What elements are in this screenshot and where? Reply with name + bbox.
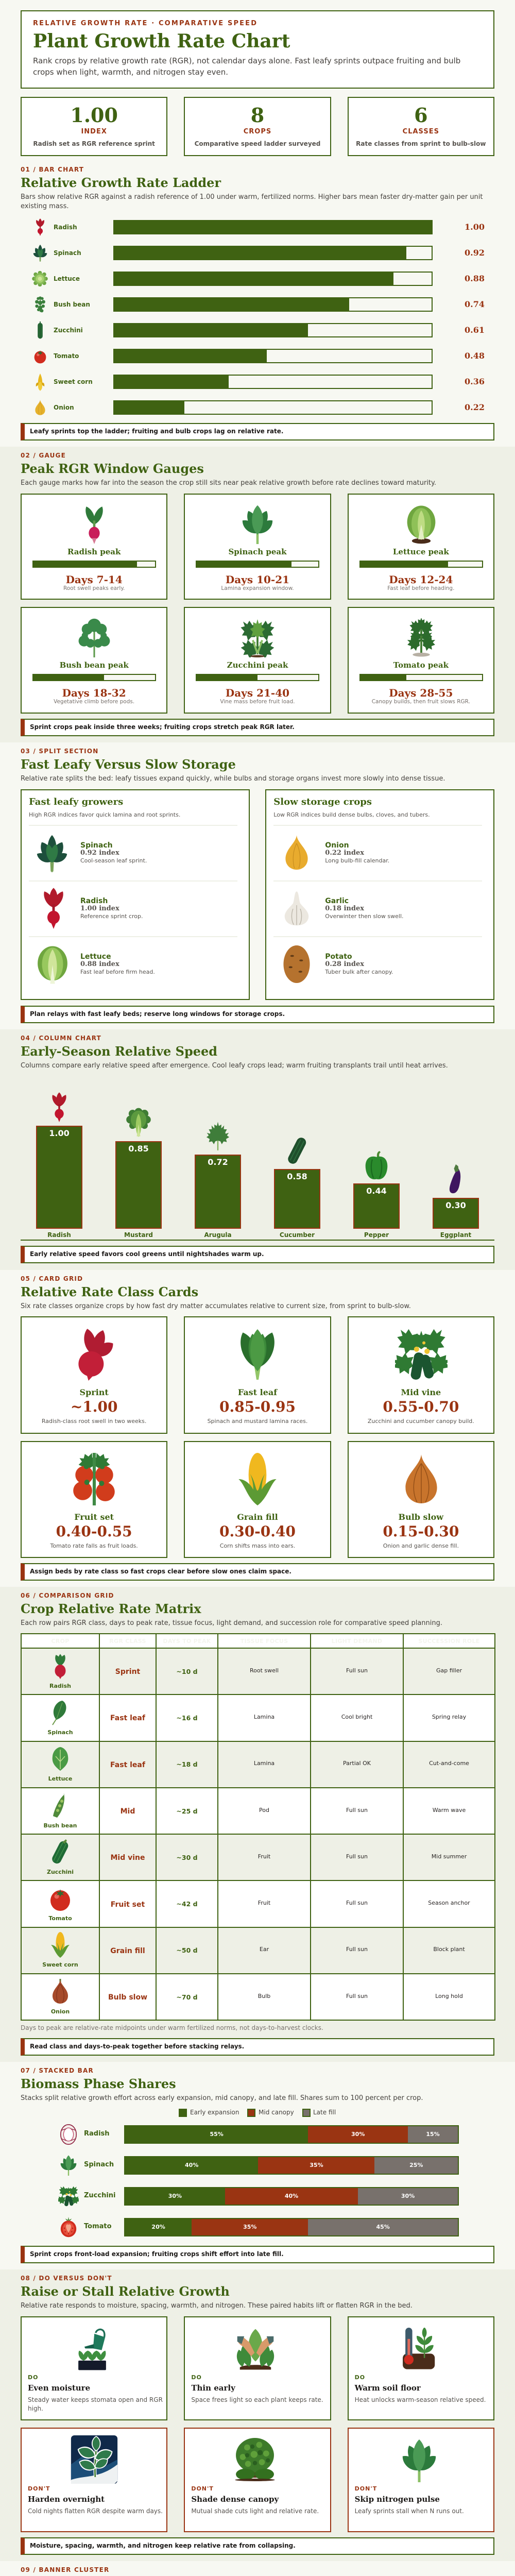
don't card: shade dense canopy: DON'T [191, 2485, 214, 2492]
class card: fruit set: Fruit set [74, 1512, 114, 1522]
comparison table: Spinach [47, 1729, 73, 1736]
stat card: classes [348, 97, 494, 156]
class card: mid vine [348, 1316, 494, 1434]
comparison table: Cut-and-come [429, 1760, 469, 1767]
crop item: garlic: 0.18 index [325, 905, 364, 912]
column: arugula: 0.72 [208, 1157, 228, 1167]
comparison table: DAYS TO PEAK [163, 1637, 211, 1645]
do card: thin early [184, 2316, 331, 2420]
crop item: potato [283, 945, 393, 983]
heading: Raise or Stall Relative Growth [21, 2284, 230, 2299]
class card: fruit set: Tomato rate falls as fruit loads. [50, 1543, 138, 1549]
comparison table: Ear [260, 1946, 269, 1953]
legend: Early expansion [190, 2109, 239, 2116]
bar row: spinach: 0.92 [465, 248, 485, 258]
column: cucumber: 0.58 [287, 1172, 307, 1181]
column: cucumber: Cucumber [280, 1231, 315, 1239]
class card: fast leaf [184, 1316, 331, 1434]
comparison table: Tomato [48, 1915, 72, 1922]
column: eggplant [433, 1164, 479, 1239]
legend: Late fill [313, 2109, 336, 2116]
crop item: radish [44, 888, 143, 929]
comparison table: TISSUE FOCUS [241, 1637, 288, 1645]
section 04: column chart [0, 1029, 515, 1270]
crop item: lettuce: Fast leaf before firm head. [80, 969, 155, 975]
gauge card: bush bean: Vegetative climb before pods. [54, 699, 134, 705]
stacked row: zucchini: Zucchini [84, 2192, 116, 2199]
column: radish: Radish [47, 1231, 71, 1239]
stacked row: zucchini: 40% [285, 2193, 298, 2199]
class card: fast leaf: Fast leaf [238, 1387, 277, 1397]
bar row: zucchini: 0.61 [465, 325, 485, 335]
bar row: onion: Onion [54, 404, 74, 411]
gauge card: bush bean [21, 607, 167, 714]
comparison table: Gap filler [436, 1667, 462, 1674]
class card: bulb slow: 0.15-0.30 [383, 1523, 459, 1540]
column: cucumber [274, 1138, 320, 1239]
stacked row: radish: 55% [210, 2131, 224, 2138]
comparison table: Fast leaf [110, 1714, 145, 1722]
section label: 04 / COLUMN CHART [21, 1035, 101, 1042]
gauge card: bush bean: Bush bean peak [60, 660, 129, 670]
comparison table: Sprint [115, 1668, 140, 1676]
crop item: potato: 0.28 index [325, 960, 364, 968]
comparison table: Bush bean [43, 1822, 77, 1829]
bar row: bush bean: Bush bean [54, 301, 90, 308]
class card: bulb slow: Onion and garlic dense fill. [383, 1543, 459, 1549]
comparison table: Sweet corn [42, 1961, 78, 1968]
don't card: harden overnight: Harden overnight [28, 2495, 105, 2504]
comparison table: LIGHT DEMAND [332, 1637, 382, 1645]
section 06: comparison grid [0, 1587, 515, 2062]
do card: thin early: Thin early [191, 2383, 235, 2393]
bar row: onion: 0.22 [465, 402, 485, 412]
gauge card: zucchini: Days 21-40 [226, 687, 289, 699]
callout [21, 1246, 494, 1263]
section 02: gauges [0, 447, 515, 742]
stacked row: spinach: 25% [409, 2162, 423, 2168]
comparison table: ~42 d [176, 1900, 198, 1908]
section 05: card grid [21, 1275, 494, 1581]
gauge card: tomato: Days 28-55 [389, 687, 453, 699]
comparison table: Fruit set [111, 1901, 145, 1909]
don't card: shade dense canopy [184, 2428, 331, 2532]
bar row: lettuce: 0.88 [465, 274, 485, 283]
crop item: spinach: 0.92 index [80, 849, 119, 857]
crop item: radish: Radish [80, 897, 108, 905]
don't card: skip nitrogen pulse: Skip nitrogen pulse [355, 2495, 440, 2504]
comparison table: Lamina [254, 1760, 274, 1767]
stacked row: radish: 30% [351, 2131, 365, 2138]
class card: mid vine: Mid vine [401, 1387, 441, 1397]
comparison table: Spring relay [432, 1714, 466, 1720]
do card: even moisture: Steady water keeps stomata open and RGR high. [28, 2396, 163, 2412]
do card: even moisture [21, 2316, 167, 2420]
don't card: skip nitrogen pulse [348, 2428, 494, 2532]
section: hero and stats [21, 10, 494, 156]
comparison table: Mid [121, 1807, 135, 1816]
stat card: crops: Comparative speed ladder surveyed [195, 140, 320, 147]
section label: 01 / BAR CHART [21, 166, 84, 173]
column: mustard [115, 1108, 162, 1239]
stat card: index: 1.00 [70, 104, 118, 127]
class card: bulb slow: Bulb slow [399, 1512, 443, 1522]
callout [21, 2038, 494, 2056]
class card: sprint [21, 1316, 167, 1434]
stacked row: spinach: 35% [310, 2162, 323, 2168]
comparison table: Full sun [346, 1900, 368, 1906]
heading: Early-Season Relative Speed [21, 1044, 217, 1059]
comparison table [21, 1633, 495, 2021]
section 01: bar chart [21, 166, 494, 440]
heading: Peak RGR Window Gauges [21, 461, 204, 476]
stacked row: spinach [61, 2156, 459, 2176]
comparison table: Lamina [254, 1714, 274, 1720]
stacked row: zucchini: 30% [401, 2193, 415, 2199]
gauge card: lettuce: Lettuce peak [393, 547, 449, 556]
stacked row: radish: 15% [426, 2131, 440, 2138]
panel: slow storage crops: Low RGR indices build dense bulbs, cloves, and tubers. [273, 811, 430, 818]
comparison table: Block plant [433, 1946, 465, 1953]
stat card: classes: CLASSES [403, 128, 439, 135]
comparison table: Grain fill [110, 1947, 145, 1955]
column: pepper [353, 1151, 400, 1239]
class card: sprint: ~1.00 [71, 1398, 117, 1415]
crop item: lettuce [38, 946, 155, 984]
stacked row: tomato [61, 2217, 459, 2237]
class card: sprint: Radish-class root swell in two weeks. [42, 1418, 146, 1425]
comparison table: RGR CLASS [109, 1637, 146, 1645]
callout [21, 423, 494, 440]
comparison table: Bulb slow [108, 1993, 147, 2002]
legend [179, 2109, 336, 2117]
gauge card: tomato: Canopy builds, then fruit slows RGR. [372, 699, 470, 705]
gauge card: spinach: Days 10-21 [226, 573, 289, 586]
table footnote: Days to peak are relative-rate midpoints under warm fertilized norms, not days-to-harvest clocks. [21, 2024, 323, 2031]
do card: warm soil floor: Heat unlocks warm-season relative speed. [355, 2396, 486, 2403]
comparison table: CROP [51, 1637, 70, 1645]
panel: slow storage crops: Slow storage crops [273, 796, 372, 807]
section 09: banner cluster [21, 2566, 257, 2576]
class card: fruit set: 0.40-0.55 [56, 1523, 132, 1540]
gauge card: radish: Root swell peaks early. [63, 585, 125, 591]
class card: bulb slow [348, 1441, 494, 1558]
section label: 02 / GAUGE [21, 452, 66, 459]
column: arugula [195, 1122, 241, 1239]
comparison table: Full sun [346, 1993, 368, 1999]
panel: slow storage crops [265, 789, 494, 1000]
intro text: Rank crops by relative growth rate (RGR), not calendar days alone. Fast leafy sprints outpace fruiting and bulb crops when light, warmth, and nitrogen stay even. [33, 56, 460, 77]
gauge card: bush bean: Days 18-32 [62, 687, 126, 699]
section label: 03 / SPLIT SECTION [21, 748, 99, 755]
crop item: garlic: Overwinter then slow swell. [325, 913, 404, 920]
heading: Relative Growth Rate Ladder [21, 175, 221, 190]
comparison table: Root swell [250, 1667, 279, 1674]
comparison table: Fruit [258, 1900, 270, 1906]
comparison table: Fruit [258, 1853, 270, 1860]
column: mustard: Mustard [124, 1231, 153, 1239]
don't card: shade dense canopy: Mutual shade cuts light and relative rate. [191, 2507, 319, 2515]
gauge card: zucchini: Vine mass before fruit load. [220, 699, 295, 705]
callout [21, 2246, 494, 2263]
column: eggplant: 0.30 [445, 1200, 466, 1210]
comparison table: Pod [259, 1807, 269, 1814]
stacked row: spinach: 40% [185, 2162, 198, 2168]
section description: Stacks split relative growth effort across early expansion, mid canopy, and late fill. Shares sum to 100 percent per crop. [21, 2094, 423, 2102]
section 08: do versus don't [0, 2269, 515, 2561]
section 07: stacked bar [21, 2067, 494, 2263]
comparison table: Fast leaf [110, 1761, 145, 1769]
class card: mid vine: Zucchini and cucumber canopy build. [368, 1418, 474, 1425]
stat card: classes: 6 [414, 104, 428, 127]
do card: warm soil floor: DO [355, 2374, 365, 2381]
stacked row: tomato: 35% [243, 2224, 256, 2230]
panel: hero header [21, 10, 494, 89]
column: pepper: 0.44 [366, 1186, 387, 1196]
bar row: lettuce: Lettuce [54, 275, 80, 282]
gauge card: lettuce [348, 494, 494, 600]
callout: Early relative speed favors cool greens until nightshades warm up. [30, 1250, 264, 1258]
gauge card: radish: Radish peak [67, 547, 121, 556]
section description: Relative rate responds to moisture, spacing, warmth, and nitrogen. These paired habits lift or flatten RGR in the bed. [21, 2302, 413, 2310]
gauge card: spinach [184, 494, 331, 600]
bar row: radish [36, 218, 485, 236]
stat card: index: Radish set as RGR reference sprint [33, 140, 155, 147]
comparison table: ~25 d [176, 1807, 198, 1815]
bar row: tomato: Tomato [54, 352, 79, 360]
legend: Mid canopy [259, 2109, 294, 2116]
callout: Moisture, spacing, warmth, and nitrogen keep relative rate from collapsing. [30, 2542, 296, 2549]
gauge card: spinach: Spinach peak [228, 547, 287, 556]
comparison table: ~30 d [176, 1854, 198, 1861]
panel: fast leafy growers: Fast leafy growers [29, 796, 123, 807]
crop item: onion: Onion [325, 841, 349, 850]
column: radish [36, 1092, 82, 1239]
heading: Fast Leafy Versus Slow Storage [21, 757, 236, 772]
crop item: onion [285, 835, 389, 870]
comparison table: Full sun [346, 1853, 368, 1860]
callout [21, 719, 494, 736]
panel: fast leafy growers: High RGR indices favor quick lamina and root sprints. [29, 811, 180, 818]
crop item: radish: 1.00 index [80, 905, 119, 912]
do card: thin early: Space frees light so each plant keeps rate. [191, 2396, 323, 2403]
gauge card: zucchini: Zucchini peak [227, 660, 288, 670]
section label: 06 / COMPARISON GRID [21, 1592, 114, 1599]
gauge card: lettuce: Days 12-24 [389, 573, 453, 586]
gauge card: spinach: Lamina expansion window. [221, 585, 294, 591]
bar row: tomato: 0.48 [465, 351, 485, 361]
bar row: spinach: Spinach [54, 249, 81, 257]
comparison table: Mid vine [110, 1854, 145, 1862]
comparison table: Partial OK [343, 1760, 371, 1767]
comparison table: ~10 d [176, 1668, 198, 1675]
column: pepper: Pepper [364, 1231, 389, 1239]
don't card: harden overnight: Cold nights flatten RGR despite warm days. [28, 2507, 163, 2515]
callout [21, 1006, 494, 1023]
comparison table: Season anchor [428, 1900, 470, 1906]
stat card: crops: 8 [251, 104, 264, 127]
class card: grain fill: Grain fill [237, 1512, 278, 1522]
section description: Columns compare early relative speed after emergence. Cool leafy crops lead; warm fruiting transplants trail until heat arrives. [21, 1062, 448, 1070]
do card: warm soil floor [348, 2316, 494, 2420]
crop item: spinach: Spinach [80, 841, 113, 850]
comparison table: SUCCESSION ROLE [418, 1637, 480, 1645]
comparison table: Lettuce [48, 1775, 72, 1782]
crop item: garlic: Garlic [325, 897, 349, 905]
bar row: bush bean: 0.74 [465, 299, 485, 309]
callout [21, 1563, 494, 1581]
comparison table: Long hold [435, 1993, 463, 1999]
section description: Bars show relative RGR against a radish reference of 1.00 under warm, fertilized norms. Higher bars mean faster dry-matter gain per unit existing mass. [21, 193, 483, 210]
do card: even moisture: DO [28, 2374, 38, 2381]
bar row: radish: Radish [54, 224, 77, 231]
bar row: sweet corn [36, 374, 485, 391]
bar row: sweet corn: Sweet corn [54, 378, 93, 385]
comparison table: ~70 d [176, 1993, 198, 2001]
eyebrow: RELATIVE GROWTH RATE · COMPARATIVE SPEED [33, 20, 258, 27]
don't card: harden overnight: DON'T [28, 2485, 50, 2492]
stat card: index [21, 97, 167, 156]
section 03: split [21, 748, 494, 1023]
gauge card: radish: Days 7-14 [66, 573, 123, 586]
do card: warm soil floor: Warm soil floor [355, 2383, 421, 2393]
gauge card: tomato [348, 607, 494, 714]
bar row: sweet corn: 0.36 [465, 377, 485, 386]
don't card: harden overnight [21, 2428, 167, 2532]
column: radish: 1.00 [49, 1128, 70, 1138]
gauge card: zucchini [184, 607, 331, 714]
comparison table: Bulb [258, 1993, 270, 1999]
stacked row: zucchini: 30% [168, 2193, 182, 2199]
crop item: potato: Potato [325, 953, 352, 961]
crop item: onion: Long bulb-fill calendar. [325, 857, 389, 864]
don't card: skip nitrogen pulse: Leafy sprints stall when N runs out. [355, 2507, 464, 2515]
callout: Assign beds by rate class so fast crops clear before slow ones claim space. [30, 1568, 291, 1575]
comparison table: Mid summer [432, 1853, 467, 1860]
comparison table: Warm wave [433, 1807, 466, 1814]
column: eggplant: Eggplant [440, 1231, 471, 1239]
do card: thin early: DO [191, 2374, 202, 2381]
section label: 07 / STACKED BAR [21, 2067, 94, 2074]
class card: fruit set [21, 1441, 167, 1558]
comparison table: Zucchini [47, 1869, 74, 1875]
gauge card: tomato: Tomato peak [393, 660, 449, 670]
class card: grain fill: Corn shifts mass into ears. [220, 1543, 295, 1549]
crop item: radish: Reference sprint crop. [80, 913, 143, 920]
stacked row: tomato: 45% [376, 2224, 390, 2230]
heading: Biomass Phase Shares [21, 2076, 176, 2091]
stacked row: radish: Radish [84, 2130, 110, 2138]
comparison table: Onion [51, 2008, 70, 2015]
comparison table: Full sun [346, 1946, 368, 1953]
class card: mid vine: 0.55-0.70 [383, 1398, 459, 1415]
comparison table: ~18 d [176, 1760, 198, 1768]
section label: 08 / DO VERSUS DON'T [21, 2275, 112, 2282]
stacked row: spinach: Spinach [84, 2161, 114, 2168]
gauge card: radish [21, 494, 167, 600]
bar row: radish: 1.00 [465, 222, 485, 232]
crop item: spinach [37, 835, 147, 872]
bar row: lettuce [32, 271, 485, 286]
callout: Sprint crops front-load expansion; fruiting crops shift effort into late fill. [30, 2250, 284, 2258]
callout: Sprint crops peak inside three weeks; fruiting crops stretch peak RGR later. [30, 723, 295, 731]
section description: Each row pairs RGR class, days to peak rate, tissue focus, light demand, and succession role for comparative speed planning. [21, 1619, 442, 1627]
stacked row: tomato: Tomato [84, 2223, 112, 2230]
stat card: classes: Rate classes from sprint to bulb-slow [356, 140, 486, 147]
comparison table: Full sun [346, 1807, 368, 1814]
gauge card: lettuce: Fast leaf before heading. [387, 585, 454, 591]
callout [21, 2537, 494, 2555]
stacked row: zucchini [58, 2187, 459, 2206]
crop item: potato: Tuber bulk after canopy. [325, 969, 393, 975]
crop item: lettuce: Lettuce [80, 953, 111, 961]
class card: grain fill [184, 1441, 331, 1558]
crop item: garlic [284, 891, 404, 925]
heading: Relative Rate Class Cards [21, 1284, 198, 1299]
comparison table: ~16 d [176, 1714, 198, 1722]
class card: sprint: Sprint [80, 1387, 109, 1397]
don't card: skip nitrogen pulse: DON'T [355, 2485, 377, 2492]
callout: Read class and days-to-peak together before stacking relays. [30, 2043, 244, 2050]
class card: fast leaf: Spinach and mustard lamina races. [208, 1418, 307, 1425]
bar row: zucchini: Zucchini [54, 327, 83, 334]
section description: Six rate classes organize crops by how fast dry matter accumulates relative to current size, from sprint to bulb-slow. [21, 1302, 411, 1310]
do card: even moisture: Even moisture [28, 2383, 90, 2393]
column: arugula: Arugula [204, 1231, 232, 1239]
stacked row: tomato: 20% [151, 2224, 165, 2230]
stat card: crops [184, 97, 331, 156]
stat card: index: INDEX [81, 128, 107, 135]
crop item: lettuce: 0.88 index [80, 960, 119, 968]
title: Plant Growth Rate Chart [33, 30, 290, 52]
crop item: spinach: Cool-season leaf sprint. [80, 857, 147, 864]
panel: fast leafy growers [21, 789, 250, 1000]
class card: grain fill: 0.30-0.40 [219, 1523, 296, 1540]
comparison table: ~50 d [176, 1946, 198, 1954]
comparison table: Cool bright [341, 1714, 372, 1720]
bar row: spinach [33, 245, 485, 262]
bar row: tomato [34, 349, 485, 364]
callout: Leafy sprints top the ladder; fruiting and bulb crops lag on relative rate. [30, 428, 283, 435]
bar row: bush bean [35, 296, 485, 312]
callout: Plan relays with fast leafy beds; reserve long windows for storage crops. [30, 1010, 285, 1018]
bar row: zucchini [38, 321, 485, 339]
bar row: onion [35, 400, 485, 415]
section label: 09 / BANNER CLUSTER [21, 2566, 109, 2573]
column: mustard: 0.85 [128, 1144, 149, 1154]
section label: 05 / CARD GRID [21, 1275, 83, 1282]
heading: Crop Relative Rate Matrix [21, 1601, 201, 1616]
comparison table: Full sun [346, 1667, 368, 1674]
stat card: crops: CROPS [244, 128, 271, 135]
don't card: shade dense canopy: Shade dense canopy [191, 2495, 279, 2504]
class card: fast leaf: 0.85-0.95 [219, 1398, 296, 1415]
section description: Each gauge marks how far into the season the crop still sits near peak relative growth before rate declines toward maturity. [21, 479, 436, 487]
crop item: onion: 0.22 index [325, 849, 364, 857]
comparison table: Radish [49, 1683, 71, 1689]
stacked row: radish [60, 2124, 459, 2145]
section description: Relative rate splits the bed: leafy tissues expand quickly, while bulbs and storage organs invest more slowly into dense tissue. [21, 775, 445, 783]
